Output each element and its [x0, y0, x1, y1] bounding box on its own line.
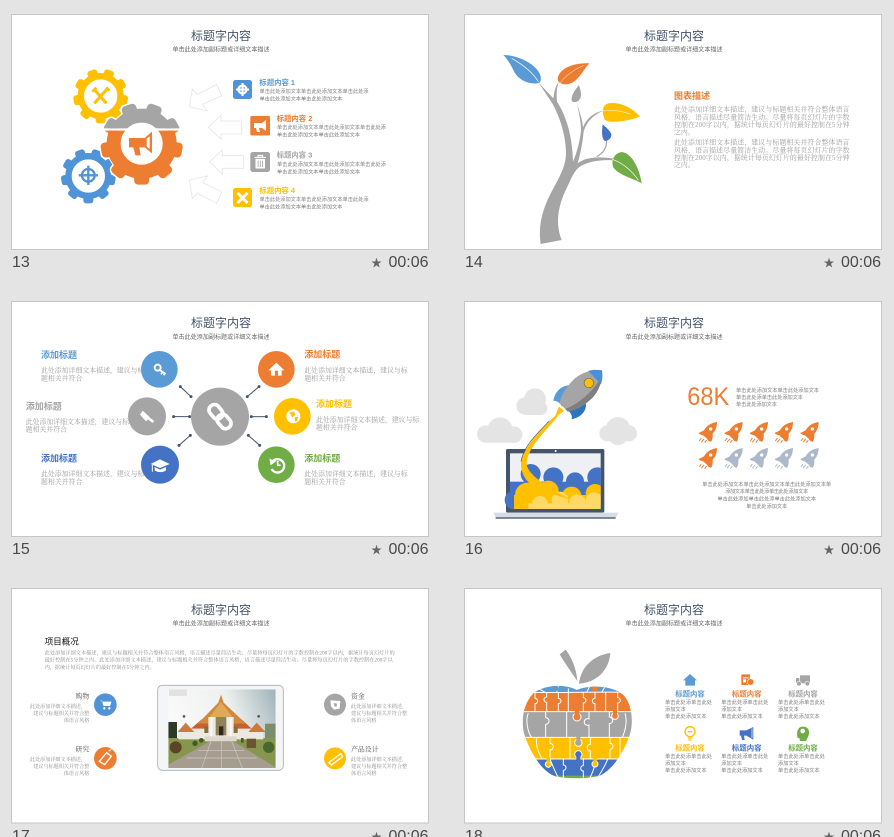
footer: slide 15: ★	[371, 544, 382, 556]
paragraph 2: 此处添加详细文本描述，建议与标题相关并符合整体语言	[674, 138, 850, 148]
text: dark blue item: 添加标题	[41, 452, 77, 463]
overview paragraph: 此处添加详细文本描述，建议与标题相关并符合整体语言风格，语言描述尽量简洁生动。尽量将每页幻灯片的字数控制在200字以内，据统计每页幻灯片的	[45, 650, 395, 657]
paragraph 1: 此处添加详细文本描述，建议与标题相关并符合整体语言	[674, 104, 850, 114]
paragraph 2	[674, 138, 850, 169]
text: funding: 建议与标题相关并符合整	[351, 710, 407, 717]
text: product design: 建议与标题相关并符合整	[351, 763, 407, 770]
item 2 text: 单击此处添加文本单击此处添加文本	[277, 130, 360, 138]
item: blue: 标题内容	[675, 689, 705, 698]
blue gear	[61, 149, 116, 203]
footer: slide 15	[12, 541, 429, 558]
text: product design: 体语言风格	[351, 770, 376, 777]
item 4 text: 单击此处添加文本单击此处添加文本	[260, 202, 342, 210]
centered caption: 单击此处添加文本	[746, 502, 787, 510]
item: gray: 单击此处添单击此处	[778, 698, 825, 706]
text: shopping: 体语言风格	[64, 717, 89, 724]
text: orange item: 题相关并符合	[304, 374, 346, 382]
item 3 text	[277, 150, 387, 176]
item: gray: 单击此处添加文本	[778, 712, 820, 720]
centered caption: 添加文本单击此处添单击此处添加文本	[725, 487, 808, 495]
subtitle: 单击此处添加副标题或详细文本描述	[626, 333, 722, 341]
title: 标题字内容	[191, 315, 251, 330]
flame trail	[521, 407, 570, 499]
title: 标题字内容	[644, 28, 704, 43]
footer: slide 16	[465, 541, 881, 558]
tree trunk and branches	[538, 82, 613, 244]
text: orange item	[304, 348, 409, 382]
gear cluster	[61, 69, 244, 203]
arrow outlines	[189, 84, 244, 203]
text: funding: 体语言风格	[351, 717, 376, 724]
item: dark blue: 单击此处添加文本	[721, 766, 763, 774]
connector arrows	[173, 386, 267, 446]
panel: slide 13 gears	[12, 14, 428, 250]
footer: slide 18	[465, 828, 881, 837]
footer: slide 14: 00:06	[841, 254, 881, 271]
text: yellow item: 此处添加详细文本描述，建议与标	[316, 415, 420, 425]
icon: calendar	[741, 674, 754, 685]
text: shopping: 此处添加详细文本描述，	[30, 703, 86, 710]
icon circle: brush	[94, 747, 117, 770]
item 4 text: 单击此处添加文本单击此处添加文本单击此处添	[260, 195, 369, 203]
stat description: 单击此处添加文本单击此处添加文本	[736, 386, 819, 394]
item: green: 添加文本	[778, 759, 799, 767]
leaf: green	[612, 152, 642, 183]
footer: slide 17	[12, 828, 429, 837]
center tablet	[158, 685, 283, 770]
item 2 text: 单击此处添加文本单击此处添加文本单击此处添	[277, 123, 387, 131]
paragraph 2: 控制在200字以内，据统计每页幻灯片的最好控制在5分钟	[674, 153, 850, 163]
paragraph 1: 风格，语言描述尽量简洁生动。尽量将每页幻灯片的字数	[674, 112, 850, 122]
footer: slide 13	[12, 254, 429, 271]
text: research: 研究	[76, 745, 89, 754]
text: shopping: 购物	[76, 692, 89, 701]
text: orange item: 添加标题	[304, 348, 340, 359]
leaf: yellow	[602, 103, 640, 122]
stat description: 单击此处添加文本	[736, 400, 777, 408]
text: funding	[351, 692, 407, 724]
text: research	[30, 745, 89, 777]
text: yellow item: 添加标题	[316, 398, 352, 409]
item 1 text: 单击此处添加文本单击此处添加文本	[260, 94, 342, 102]
gray and orange gear	[100, 103, 183, 185]
text: blue item	[41, 349, 145, 382]
text: product design: 此处添加详细文本描述，	[351, 756, 407, 763]
footer: slide 13: 13	[12, 254, 30, 271]
icon: megaphone	[740, 727, 753, 740]
paragraph 1	[674, 104, 850, 136]
icon: head	[797, 727, 809, 741]
item 1 text	[259, 78, 369, 102]
item 2 text	[277, 114, 387, 138]
footer: slide 15: 00:06	[388, 541, 429, 558]
title: 标题字内容	[644, 315, 704, 330]
item: yellow: 标题内容	[675, 743, 705, 752]
paragraph 2: 风格，语言描述尽量简洁生动。尽量将每页幻灯片的字数	[674, 145, 850, 155]
item: orange: 添加文本	[721, 705, 742, 713]
text: orange item: 此处添加详细文本描述，建议与标	[304, 366, 409, 376]
item 3 text: 单击此处添加文本单击此处添加文本	[277, 168, 360, 176]
icon circle: cart	[94, 693, 117, 716]
centered caption: 单击此处添加文本单击此处添加文本单击此处添加文本单	[702, 480, 831, 488]
laptop	[493, 449, 618, 519]
yellow gear	[73, 69, 128, 123]
paragraph 1: 之内。	[674, 127, 695, 136]
footer: slide 13: 00:06	[388, 254, 429, 271]
screen clouds	[510, 464, 601, 509]
text: product design: 产品设计	[351, 745, 379, 754]
item: yellow: 添加文本	[665, 759, 686, 767]
footer: slide 16: 00:06	[841, 541, 881, 558]
footer: slide 14: 14	[465, 254, 483, 271]
text: blue item: 题相关并符合	[41, 374, 82, 382]
text: dark blue item: 题相关并符合	[41, 477, 82, 486]
icon circle: globe	[274, 398, 311, 435]
text: shopping	[30, 692, 89, 724]
footer: slide 16: 16	[465, 541, 483, 558]
text: blue item: 此处添加详细文本描述，建议与标	[41, 366, 145, 376]
text: research: 此处添加详细文本描述，	[30, 756, 86, 763]
item 3 text: 标题内容 3	[277, 150, 312, 160]
text: green item: 添加标题	[304, 452, 340, 463]
icon: megaphone square	[250, 116, 270, 136]
text: gray item: 添加标题	[26, 400, 62, 411]
text: research: 体语言风格	[64, 770, 89, 777]
item: gray: 添加文本	[778, 705, 799, 713]
icon: megaphone	[129, 132, 152, 155]
footer: slide 14	[465, 254, 881, 271]
footer: slide 16: ★	[824, 544, 834, 556]
subtitle: 单击此处添加副标题或详细文本描述	[172, 620, 270, 628]
item: gray: 标题内容	[788, 689, 818, 698]
leaf: gray	[572, 85, 581, 102]
item: gray	[778, 689, 825, 720]
text: gray item: 题相关并符合	[26, 425, 67, 434]
overview paragraph: 内，据统计每页幻灯片的最好控制在5分钟之内。	[45, 664, 155, 671]
text: dark blue item	[41, 452, 145, 486]
leaf: orange	[558, 63, 589, 84]
item: dark blue	[721, 743, 768, 774]
icon circle: house	[258, 351, 295, 388]
icon: truck	[796, 675, 810, 686]
subtitle: 单击此处添加副标题或详细文本描述	[172, 333, 270, 341]
text: green item: 此处添加详细文本描述，建议与标	[304, 469, 409, 479]
panel: slide 15 hub diagram	[12, 302, 428, 536]
rocket illustration	[477, 361, 637, 519]
hub circle with chain icon	[191, 388, 249, 446]
text: yellow item: 题相关并符合	[316, 423, 357, 432]
footer: slide 14: ★	[824, 258, 834, 270]
overview paragraph: 最好控制在5分钟之内。此处添加详细文本描述，建议与标题相关并符合整体语言风格，语言描述尽量简洁生动。尽量将每页幻灯片的字数控制在200字以	[45, 657, 394, 664]
heading: overview: 项目概况	[45, 637, 79, 647]
paragraph 2: 之内。	[674, 160, 695, 169]
apple puzzle bands	[522, 686, 632, 778]
heading: chart description: 图表描述	[674, 90, 710, 101]
text: gray item: 此处添加详细文本描述，建议与标	[26, 417, 130, 427]
title: 标题字内容	[191, 28, 251, 43]
item: green	[778, 743, 825, 774]
panel: slide 17 project overview	[12, 588, 428, 823]
footer: slide 13: ★	[371, 258, 382, 270]
title: 标题字内容	[644, 602, 704, 617]
item: green: 单击此处添单击此处	[778, 752, 825, 760]
item 1 text: 单击此处添加文本单击此处添加文本单击此处添	[260, 87, 369, 95]
item: orange: 单击此处添加文本	[721, 712, 763, 720]
panel: slide 16 rocket	[464, 302, 882, 536]
text: green item	[304, 452, 409, 486]
hub illustration	[128, 351, 311, 484]
text: dark blue item: 此处添加详细文本描述，建议与标	[41, 469, 145, 479]
subtitle: 单击此处添加副标题或详细文本描述	[626, 620, 722, 628]
clouds	[477, 388, 637, 445]
item: green: 单击此处添加文本	[778, 766, 820, 774]
leaf: blue	[503, 55, 541, 83]
icon circle: box	[324, 694, 346, 716]
title: 标题字内容	[191, 602, 251, 617]
icon: house	[683, 674, 697, 686]
item 1 text: 标题内容 1	[259, 78, 295, 87]
icons row	[683, 674, 810, 741]
item: blue	[665, 689, 712, 720]
item: dark blue: 单击此处添单击此处	[721, 752, 768, 760]
paragraph 1: 控制在200字以内，据统计每页幻灯片的最好控制在5分钟	[674, 120, 850, 130]
subtitle: 单击此处添加副标题或详细文本描述	[172, 46, 270, 54]
item 4 text: 标题内容 4	[259, 186, 296, 195]
icon circle: gavel	[128, 397, 166, 435]
item: orange: 单击此处添单击此处	[721, 698, 768, 706]
text: product design	[351, 745, 407, 777]
apple illustration	[515, 650, 635, 780]
temple photo	[168, 689, 276, 768]
overview paragraph	[45, 650, 395, 671]
item: blue: 单击此处添单击此处	[665, 698, 712, 706]
item: orange	[721, 689, 768, 720]
icon: light bulb	[685, 727, 695, 740]
rocket	[553, 361, 611, 419]
text: research: 建议与标题相关并符合整	[33, 763, 89, 770]
puzzle knobs	[545, 685, 618, 767]
item: orange: 标题内容	[732, 689, 762, 698]
text: gray item	[26, 400, 130, 434]
item: dark blue: 添加文本	[721, 759, 742, 767]
leaf: dark blue	[602, 124, 611, 141]
item: green: 标题内容	[788, 743, 818, 752]
text: funding: 资金	[351, 692, 365, 701]
footer: slide 15: 15	[12, 541, 30, 558]
item 3 text: 单击此处添加文本单击此处添加文本单击此处添	[277, 160, 387, 168]
panel: slide 14 tree	[464, 14, 882, 250]
tree illustration	[503, 55, 642, 244]
centered caption	[702, 480, 831, 510]
text: shopping: 建议与标题相关并符合整	[33, 710, 89, 717]
text: blue item: 添加标题	[41, 349, 77, 360]
icon circle: pencil	[324, 747, 346, 769]
icon circle: key	[141, 351, 178, 388]
tablet frame	[158, 685, 283, 770]
stat description	[736, 386, 819, 408]
text: yellow item	[316, 398, 420, 432]
centered caption: 单击此处添加单击此处添单击此处添加文本	[717, 494, 816, 502]
panel: slide 18 apple puzzle	[464, 588, 882, 823]
item: yellow: 单击此处添单击此处	[665, 752, 712, 760]
stat: 68K: 68K	[687, 383, 730, 411]
icon: tools square	[233, 188, 252, 207]
stat description: 单击此处添单击此处添加文本	[736, 393, 803, 401]
icon circle: graduation cap	[141, 446, 179, 484]
icon: trash square	[250, 152, 270, 172]
text: funding: 此处添加详细文本描述，	[351, 703, 407, 710]
item: dark blue: 标题内容	[732, 743, 762, 752]
item 2 text: 标题内容 2	[277, 114, 312, 123]
apple leaves	[560, 650, 610, 684]
text: green item: 题相关并符合	[304, 477, 346, 486]
item: blue: 添加文本	[665, 705, 686, 713]
item: yellow: 单击此处添加文本	[665, 766, 707, 774]
item: blue: 单击此处添加文本	[665, 712, 707, 720]
subtitle: 单击此处添加副标题或详细文本描述	[626, 46, 722, 54]
icon: target square	[233, 80, 252, 99]
icon circle: history	[258, 446, 295, 483]
pictogram row of rockets	[699, 422, 819, 469]
item: yellow	[665, 743, 712, 774]
item 4 text	[259, 186, 369, 210]
circle icons	[94, 693, 346, 770]
